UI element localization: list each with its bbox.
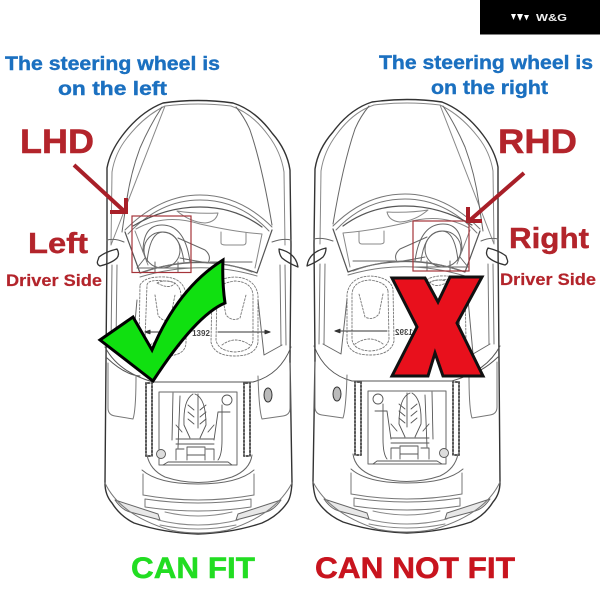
heading: right [379,52,593,99]
icon: red X [392,277,483,376]
heading: left [5,53,220,100]
heading: left: The steering wheel is [5,53,220,75]
label: right driver side: Driver Side [500,271,596,289]
arrow: RHD [468,173,524,221]
logo banner [480,0,600,34]
verdict: can fit: CAN FIT [131,552,255,585]
highlight box: left wheel [132,216,191,272]
icon: green check mark [100,260,225,381]
verdict: can not fit: CAN NOT FIT [315,552,515,585]
left car line drawing [97,100,298,534]
highlight box: right wheel [413,221,469,271]
logo banner: W&G [536,12,567,24]
label: Left: Left [28,228,88,260]
arrow: LHD [74,165,126,212]
heading: right: The steering wheel is [379,52,593,74]
label: RHD: RHD [498,123,577,161]
label: left driver side: Driver Side [6,272,102,290]
heading: left: on the left [58,78,168,100]
label: Right: Right [509,223,589,255]
right car line drawing (mirrored) [307,100,508,533]
label: LHD: LHD [20,123,94,161]
heading: right: on the right [431,77,549,99]
